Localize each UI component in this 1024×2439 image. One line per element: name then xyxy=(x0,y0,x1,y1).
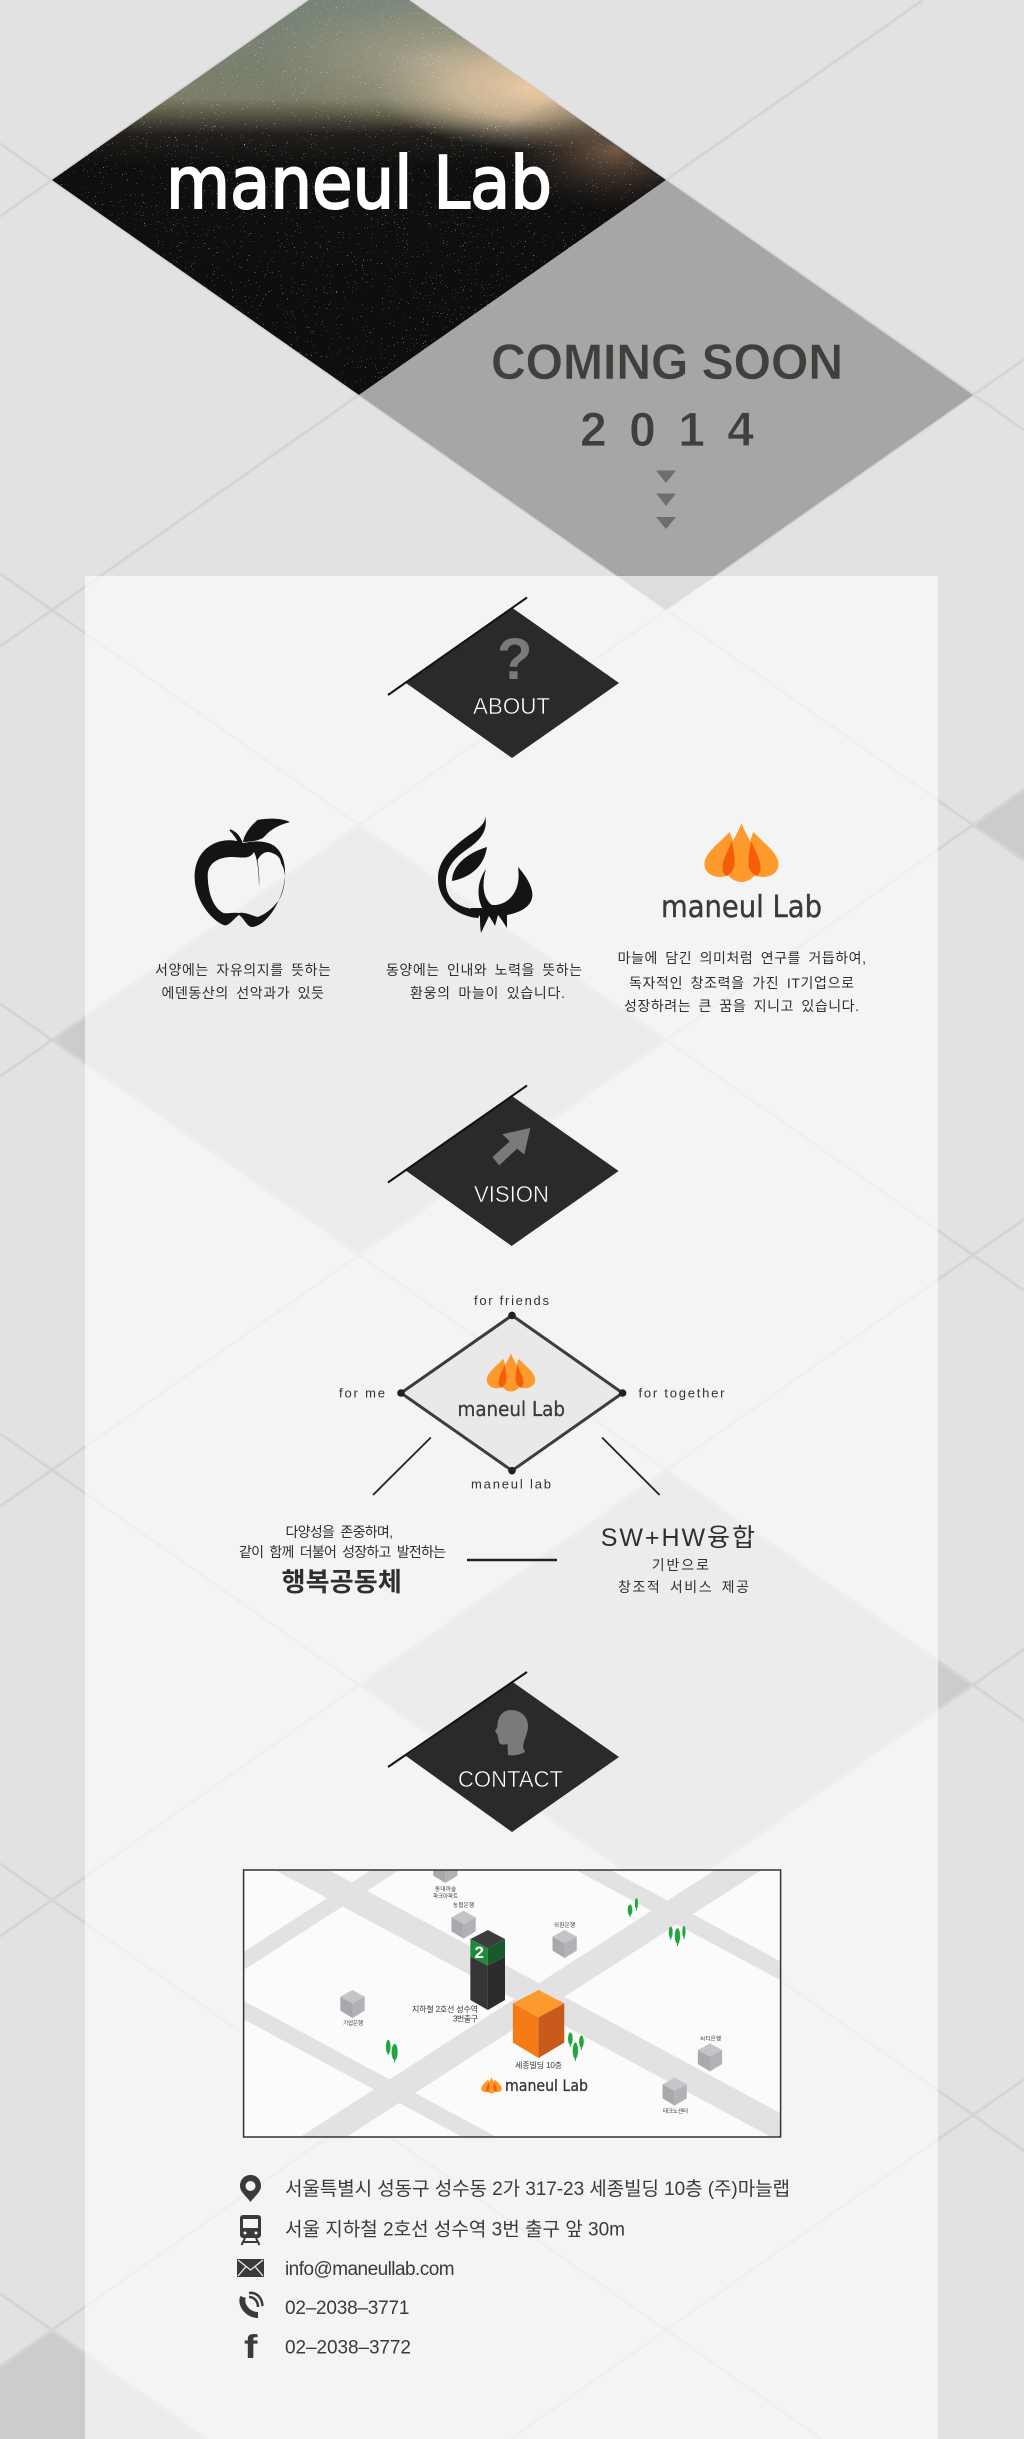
text: brand caption: 성장하려는 큰 꿈을 지니고 있습니다. xyxy=(624,998,859,1014)
map labels: 세종빌딩 10층 xyxy=(515,2060,562,2070)
text: convergence: 창조적 서비스 제공 xyxy=(618,1579,749,1595)
map labels xyxy=(343,1885,721,2115)
connector lines xyxy=(373,1438,660,1560)
subway number: 2 xyxy=(474,1943,484,1962)
map labels: 외환은행 xyxy=(554,1921,575,1929)
contact badge xyxy=(388,1672,619,1832)
trees xyxy=(386,1898,685,2062)
subway tower xyxy=(470,1930,505,2010)
map labels: 기업은행 xyxy=(343,2019,363,2027)
hero photo diamond xyxy=(52,0,730,395)
text: community xyxy=(239,1524,446,1597)
icon: mail xyxy=(237,2259,264,2277)
label: maneul lab: maneul lab xyxy=(471,1477,551,1492)
coming soon gray diamond xyxy=(359,180,973,610)
contact list xyxy=(237,2175,790,2365)
icon: head xyxy=(495,1710,528,1755)
text: brand caption xyxy=(618,950,866,1014)
text: apple caption: 서양에는 자유의지를 뜻하는 xyxy=(155,962,331,978)
year: 2014 xyxy=(580,404,754,457)
column: apple xyxy=(155,819,331,1001)
map labels: 동대까슬 xyxy=(435,1885,456,1893)
text: brand caption: 마늘에 담긴 의미처럼 연구를 거듭하여, xyxy=(618,950,866,966)
map labels: 3번출구 xyxy=(453,2014,478,2024)
label: for together: for together xyxy=(638,1386,725,1400)
text: convergence: 기반으로 xyxy=(652,1557,709,1573)
icon: fax: f xyxy=(244,2328,259,2365)
contact label: CONTACT xyxy=(458,1766,563,1792)
section: contact xyxy=(237,1671,788,2358)
logo: wordmark: maneul Lab xyxy=(458,1397,565,1421)
map xyxy=(242,1869,782,2138)
map logo: maneul Lab xyxy=(505,2076,588,2095)
icon: pin xyxy=(240,2175,261,2202)
text: convergence: SW+HW융합 xyxy=(601,1524,755,1552)
map labels: 농협은행 xyxy=(453,1901,474,1909)
text: address: 서울특별시 성동구 성수동 2가 317-23 세종빌딩 10층 (주)마늘랩 xyxy=(285,2178,790,2200)
logo: flame xyxy=(704,823,778,882)
label: for me: for me xyxy=(339,1386,385,1400)
logo: wordmark: maneul Lab xyxy=(661,890,822,925)
map roads xyxy=(244,1870,780,2136)
text: fax: 02–2038–3772 xyxy=(285,2338,411,2358)
about label: ABOUT xyxy=(473,693,550,719)
orange building xyxy=(513,1990,564,2058)
heading: coming soon: COMING SOON xyxy=(491,334,843,390)
text: community: 다양성을 존중하며, xyxy=(286,1524,393,1540)
down arrows xyxy=(656,470,676,529)
section: vision xyxy=(239,1086,755,1597)
icon: phone xyxy=(242,2293,262,2315)
text: phone: 02–2038–3771 xyxy=(285,2298,409,2319)
icon: train xyxy=(240,2215,261,2245)
content panel xyxy=(85,576,938,2439)
text: email: info@maneullab.com xyxy=(285,2259,455,2280)
icon: arrow xyxy=(492,1128,530,1165)
text: garlic caption xyxy=(386,962,582,1001)
vision label: VISION xyxy=(474,1181,549,1207)
section: about xyxy=(155,598,866,1014)
text: garlic caption: 동양에는 인내와 노력을 뜻하는 xyxy=(386,962,582,978)
map labels: 지하철 2호선 성수역 xyxy=(412,2004,478,2014)
column: garlic xyxy=(386,816,582,1001)
map labels: 파크아파트 xyxy=(433,1892,458,1900)
column: maneul lab xyxy=(618,823,866,1014)
icon: apple xyxy=(195,819,290,927)
about badge xyxy=(388,598,619,758)
text: garlic caption: 환웅의 마늘이 있습니다. xyxy=(410,985,565,1001)
map labels: 씨티은행 xyxy=(700,2034,721,2042)
icon: question mark: ? xyxy=(497,627,532,692)
hero logo wordmark: maneul Lab xyxy=(166,141,552,225)
logo: flame xyxy=(487,1353,535,1392)
vision badge xyxy=(388,1086,619,1246)
text: community: 행복공동체 xyxy=(282,1567,402,1597)
text: community: 같이 함께 더불어 성장하고 발전하는 xyxy=(239,1544,446,1560)
text: convergence xyxy=(601,1524,755,1595)
icon: garlic sprout xyxy=(438,816,532,933)
diagram: values diamond xyxy=(339,1293,725,1492)
map labels: 테크노센터 xyxy=(663,2107,688,2115)
text: apple caption xyxy=(155,962,331,1001)
text: subway: 서울 지하철 2호선 성수역 3번 출구 앞 30m xyxy=(285,2218,625,2240)
text: brand caption: 독자적인 창조력을 가진 IT기업으로 xyxy=(629,975,854,991)
map buildings xyxy=(340,1855,722,2106)
label: for friends: for friends xyxy=(474,1293,550,1308)
text: apple caption: 에덴동산의 선악과가 있듯 xyxy=(162,985,324,1001)
